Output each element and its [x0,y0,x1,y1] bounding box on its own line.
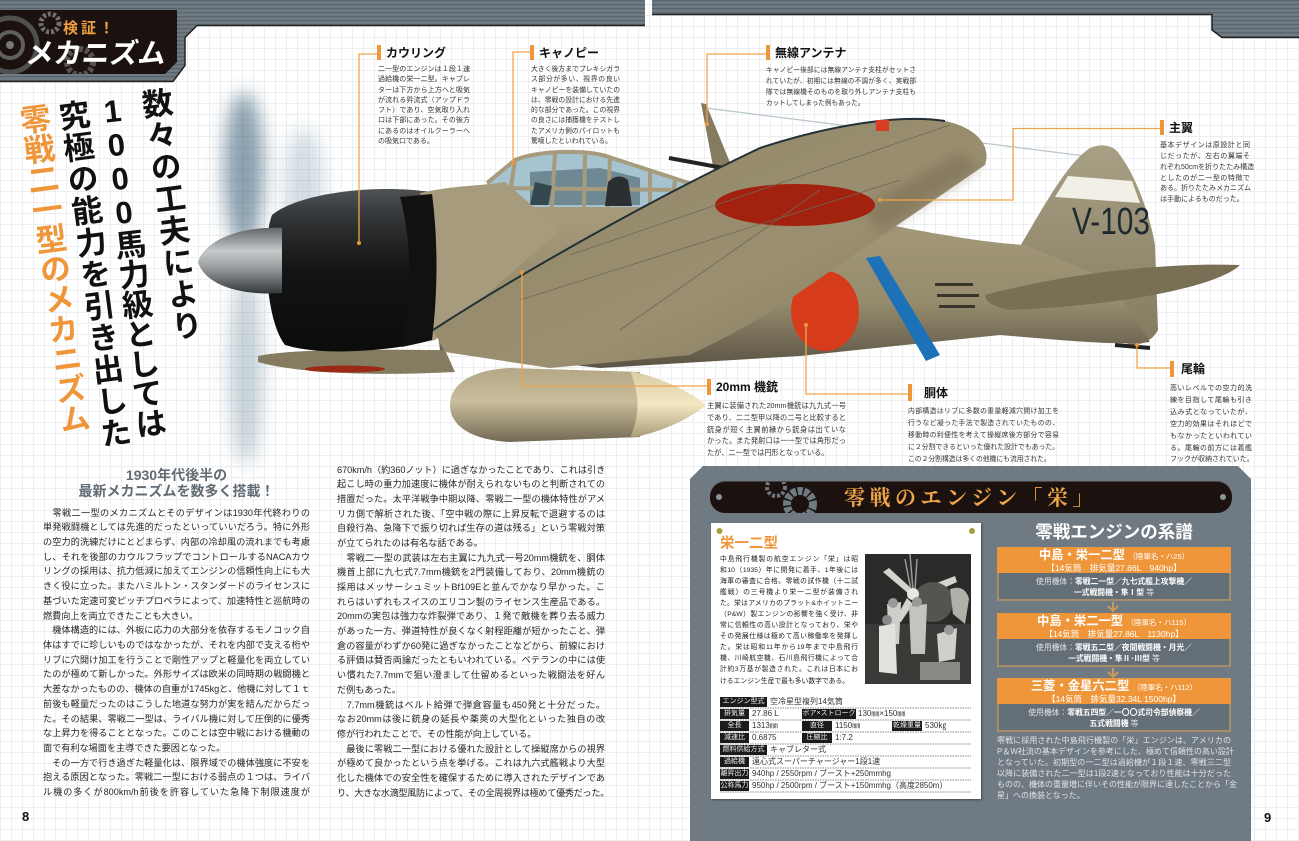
card text: 常に信頼性の高い設計となっており、栄や [720,622,858,629]
main wing [433,119,987,368]
callout: 尾輪: もなかったといわれてい [1170,433,1252,440]
box 1 header: 中島・栄一二型 （陸軍名・ハ25） [1039,548,1189,562]
panel paragraph: 以降に装備された二一型は1段2速となっており性能は十分だった [997,769,1231,778]
blue stripe [866,256,940,361]
body text column 2: 20mmの実包は強力な炸裂弾であり、１発で敵機を葬り去る威力 [337,611,605,621]
card text: 海軍の審査に合格。零戦の試作機（十二試 [720,578,858,585]
body text column 1: 面で有利な場面を主導できた要因となった。 [43,743,225,753]
card text: 艦戦）の三号機より栄一二型が装備され [720,589,858,596]
box 3 header [997,678,1231,704]
body text column 1: 零戦二一型のメカニズムとそのデザインは1930年代終わりの [52,508,310,518]
callout: 20mm 機銃: かった。また発射口は一一型では角形だっ [707,436,846,445]
row: 全長 [720,721,946,731]
lineage box 3 [997,678,1231,732]
body text column 2: が極めて良かったという点を挙げる。これは九六式艦戦より大型 [337,758,605,768]
body text column 1: た。その結果、零戦二一型は、ライバル機に対して圧倒的に優秀 [43,714,310,724]
callout: 主翼: は手動によるものだった。 [1160,196,1244,203]
antenna wire [706,108,1085,156]
card text [720,555,858,685]
body text column 1: ル機の多くが800km/h前後を許容していた急降下制限速度が [43,787,310,797]
body text column 2: 670km/h（約360ノット）に過ぎなかったことであり、これは引き [337,464,605,474]
body section heading: 1930年代後半の [126,467,227,483]
antenna mast [701,103,738,182]
body text column 1: 抱える原因となった。零戦二一型における弱点の１つは、ライバ [43,772,310,782]
lineage heading: 零戦エンジンの系譜 [1035,522,1193,542]
body text column 1: 基づいた定速可変ピッチプロペラによって、加速特性と巡航時の [43,596,310,606]
card text: た。栄は昭和11年から19年まで中島飛行 [720,644,858,651]
box 1 header [997,547,1231,573]
body text column 2: 7.7mm機銃はベルト給弾で弾倉容量も450発と十分だった。 [347,700,605,710]
header large label: メカニズム [24,38,168,69]
box 3 header: 三菱・金星六二型 （陸軍名・ハ112） [1031,679,1197,693]
body text column 1 [43,508,310,797]
box 1 aircraft: 一式戦闘機・隼Ⅰ型 等 [1074,588,1154,597]
panel paragraph: P＆W社流の基本デザインを参考にした、極めて信頼性の高い設計 [997,747,1234,756]
callout: 胴体: 胴体 [924,386,948,400]
row: 過給機: 遠心式スーパーチャージャー1段1速 [752,757,880,766]
panel paragraph [997,736,1237,800]
callout: キャノピー: ス部分が多い、視界の良い [531,76,620,83]
headline line 2: 1000馬力級としては [93,92,167,440]
engine cowling [266,189,432,351]
row: エンジン型式: 空冷星型複列14気筒 [770,697,843,706]
callout: 尾輪: フックが収納されていた。 [1170,456,1254,463]
callout: キャノピー: は、零戦の設計における先進 [531,97,620,104]
callout: 主翼: 主翼 [1169,121,1193,135]
fuselage hinomaru [791,271,859,351]
card text: 中島飛行機製の航空エンジン「栄」は昭 [720,556,858,562]
callout: 20mm 機銃: 主翼に装備された20mm機銃は九九式一号 [707,401,846,410]
callout: キャノピー: たアメリカ側のパイロットも [531,128,620,135]
body text column 2: 自殺行為、急降下で振り切れば生存の道は残る」という零戦対策 [337,523,605,533]
row: 排気量: 130㎜×150㎜ [858,709,905,718]
body text column 2: る評価は賛否両論だったともいわれている。ベテランの中には使 [337,655,605,665]
card heading: 栄一二型 [720,536,778,552]
card text: （P&W）製エンジンの影響を強く受け、非 [720,611,858,618]
callout: 主翼: ある。折りたたみメカニズム [1160,185,1251,192]
callout: キャノピー: 大きく後方までプレキシガラ [531,66,620,73]
panel paragraph: となっていた。初期型の一二型は過給機が１段１速、零戦三二型 [997,758,1231,767]
panel title bar [710,482,1232,513]
callout: 主翼: れぞれ50cmを折りたたみ構造 [1160,164,1254,171]
horizontal tail [985,265,1240,310]
body text column 1: し、それを後部のカウルフラップでコントロールするNACAカウ [43,552,310,562]
body text column 2 [337,464,609,798]
forward fuselage panel [420,182,560,342]
callout: 無線アンテナ: れていたが、初期には無線の不調が多く、実戦部 [766,78,916,85]
callout: カウリング [377,45,470,145]
callout: 胴体 [908,384,1059,463]
body text column 2: 修が行われたことで、その性能が向上している。 [337,729,536,739]
callout: 無線アンテナ: カットしてしまった例もあった。 [766,100,864,107]
headline line 1: 数々の工夫により [135,86,203,344]
body text column 2: い慣れた7.7mmで狙い澄まして仕留めるといった戦闘法を好ん [337,670,605,680]
propeller blur [224,92,324,465]
page number 9: 9 [1264,810,1271,825]
card text: 機、川崎航空機、石川島飛行機によって合 [720,655,858,662]
card text: た。栄はアメリカのプラット&ホイットニー [720,600,858,607]
callout: カウリング: ターは下方から上方へと吸気 [378,87,470,94]
page number 8: 8 [22,809,29,824]
row: 減速比: 0.6875 [752,733,776,742]
box 1 aircraft [997,573,1231,601]
row: 排気量: ボア×ストローク [802,710,856,717]
body text column 1: その一方で行き過ぎた軽量化は、限界域での機体強度に不安を [52,758,310,768]
callout: 20mm 機銃: であり、二二型甲以降の二号と比較すると [707,413,846,422]
callout: 胴体: 移動時の利便性を考えて操縦席後方部分で容易 [908,432,1059,439]
body text column 1: リブに穴開け加工を行うことで剛性アップと軽量化を両立してい [43,655,310,665]
body text column 2: なお20mmは後に銃身の延長や薬莢の大型化といった独自の改 [337,714,605,724]
header tag: 検証！メカニズム [0,10,177,74]
body section heading: 最新メカニズムを数多く搭載！ [78,483,274,499]
body text column 2: 採用はメッサーシュミットBf109Eと並んでかなり早かった。こ [337,582,605,592]
body text column 2: があった一方、弾道特性が良くなく射程距離が短かったこと、弾 [337,626,605,636]
body text column 1: 体はすでに珍しいものではなかったが、それを内部で支える桁や [43,640,310,650]
row: 燃料供給方式 [720,745,826,755]
row: 排気量: 排気量 [724,710,745,717]
callout: 胴体: 内部構造はリブに多数の重量軽減穴開け加工を [908,408,1059,415]
callout: 尾輪: る。尾輪の前方には着艦 [1170,445,1252,452]
tail fin: V-103 [1072,201,1150,243]
row: 離昇出力: 離昇出力 [720,770,748,777]
body text column 1: 大差なかったものの、機体の自重が1745kgと、他機に対して１ｔ [43,684,310,694]
body text column 1: の空力的洗練だけにとどまらず、内部の冷却風の流れまでも考慮 [43,537,310,547]
row: 排気量: 27.86 L [752,709,779,718]
body text column 1: きく役に立った。またハミルトン・スタンダードのライセンスに [43,581,310,591]
row: 全長: 直径 [810,722,824,729]
box 2 header: 中島・栄二一型 （陸軍名・ハ115） [1037,614,1191,628]
callout: 主翼: 基本デザインは原設計と同 [1160,142,1250,149]
body text column 2: 零戦二一型の武装は左右主翼に九九式一号20mm機銃を、胴体 [346,553,605,563]
callout: 20mm 機銃: 銃身が短く主翼前縁から銃身は出ていな [707,424,846,434]
row: 全長: 乾燥重量 [893,722,921,729]
callout: 主翼 [1160,120,1254,203]
callout: カウリング: 過給機の栄一二型。キャブレ [378,76,470,83]
photo: engine crew [865,554,971,684]
row: 燃料供給方式: キャブレター式 [770,745,826,754]
cowl flaps [400,194,436,347]
panel paragraph: 星」への換装となった。 [997,791,1085,800]
spec table [720,697,947,791]
tail fin [1015,145,1158,345]
row: 減速比: 1:7.2 [835,733,853,742]
vertical headline [13,86,203,451]
callout: 主翼: じだったが、左右の翼端そ [1160,153,1250,160]
callout: 胴体: 行うなど凝った手法で製造されていたものの、 [908,420,1059,427]
callout: 尾輪: 練を目指して尾輪も引き [1170,397,1252,404]
headline line 4: 零戦二一型のメカニズム [13,102,91,436]
callout: キャノピー: 驚嘆したといわれている。 [531,138,612,145]
row: 全長: 1313㎜ [752,721,778,730]
panel title text: 零戦のエンジン「栄」 [844,486,1098,510]
panel paragraph: 零戦に採用された中島飛行機製の「栄」エンジンは、アメリカの [997,736,1231,744]
body text column 2: れらはいずれもスイスのエリコン製のライセンス生産品である。 [337,597,605,607]
row: 排気量 [720,709,906,719]
callout: キャノピー [530,45,620,145]
body text column 1: たのが極めて新しかった。外形サイズは欧米の同時期の戦闘機と [43,669,310,679]
callout: カウリング: の吸気口である。 [378,138,434,145]
headline line 3: 究極の能力を引き出した [52,98,133,451]
stencil marking [935,283,979,308]
row: 全長: 1150㎜ [835,721,860,730]
callout: 胴体: この２分割構造は多くの他機にも流用された。 [908,456,1051,463]
callout: キャノピー: キャノピー [539,46,599,60]
box 2 header [997,613,1231,639]
body text column 2: 化した機体での安全性を確保するために導入されたデザインであ [337,773,605,783]
row: 全長: 530㎏ [925,721,946,730]
row: 過給機: 過給機 [724,758,745,765]
callout: カウリング: 口は下部にあった。その後方 [378,117,470,124]
callout: 尾輪: 尾輪 [1181,362,1205,376]
lineage box 2 [997,613,1231,667]
body text column 1: 燃費向上を両立できたことも大きい。 [43,611,198,621]
body text column 1: 前後も軽量だったのはこうした地道な努力が実を結んだからだっ [43,699,310,709]
callout: カウリング: にあるのはオイルクーラーへ [378,128,470,135]
body text column 1: リングの採用は、抗力低減に加えてエンジンの信頼性向上にも大 [43,566,310,576]
callout: 主翼: としたのが二一型の特徴で [1160,175,1250,182]
card text: けるエンジン生産で最も多い数字である。 [720,678,849,685]
callout: 尾輪: 込み式となっていたが、 [1170,409,1252,416]
callout: 無線アンテナ [766,45,916,107]
box 1 aircraft: 使用機体：零戦二一型／九七式艦上攻撃機／ [1036,577,1192,586]
body text column 2: 倉の容量がわずか60発に過ぎなかったことなどから、前線におけ [337,641,605,651]
box 3 header: 【14気筒 排気量32.34L 1500hp】 [1047,694,1181,704]
callout: 無線アンテナ: 無線アンテナ [775,46,847,60]
box 2 aircraft [997,639,1231,667]
body text column 2: が立てられたのは有名な話である。 [337,538,483,548]
lineage box 1 [997,547,1231,601]
box 1 header: 【14気筒 排気量27.86L 940hp】 [1046,563,1182,573]
row: 離昇出力: 940hp / 2550rpm / ブースト+250mmhg [752,769,891,778]
box 2 aircraft: 使用機体：零戦五二型／夜間戦闘機・月光／ [1036,643,1192,652]
row: 燃料供給方式: 燃料供給方式 [722,746,764,753]
callout: 20mm 機銃: 20mm 機銃 [716,380,778,394]
row: 減速比: 圧縮比 [806,734,828,741]
body text column 2: 機首上部に九七式7.7mm機銃を2門装備しており、20mm機銃の [337,567,605,577]
callout: 20mm 機銃: たが、二一型では円形となっている。 [707,448,828,457]
callout: 無線アンテナ: 隊では無線機そのものを取り外しアンテナ支柱も [766,89,916,96]
callout: カウリング: が流れる昇流式（アップドラ [378,97,470,104]
body text column 2: だ例もあった。 [337,685,401,695]
row: 公称馬力: 950hp / 2500rpm / ブースト+150mmhg（高度2850m） [752,781,947,790]
canopy [487,152,695,207]
tail wheel [1115,345,1150,348]
gear decoration [716,482,1226,513]
body text column 1: な上昇力を得ることとなった。このことは空中戦における機動の [43,728,310,738]
row: エンジン型式 [720,697,843,707]
body text column 1: 機体構造的には、外板に応力の大部分を依存するモノコック自 [52,625,310,635]
row: 全長: 全長 [728,722,742,729]
card text: その発展仕様は極めて高い稼働率を発揮し [720,633,858,640]
lower wing [258,350,455,374]
callout: 尾輪 [1170,361,1254,463]
callout: 尾輪: 空力的効果はそれほどで [1170,421,1252,428]
body text column 2: 起こし時の重力加速度に機体が耐えられないものと判断されての [337,479,605,489]
body text column 2: り、大きな水滴型風防によって、その全周視界は極めて優秀だった。 [337,788,609,798]
body section heading [78,467,274,499]
callout: 尾輪: 高いレベルでの空力的洗 [1170,385,1252,392]
callout: キャノピー: 的な部分であった。この視界 [531,107,620,114]
callout: 胴体: に２分割できるといった優れた設計でもあった。 [908,444,1059,451]
row: 公称馬力: 公称馬力 [720,782,748,789]
row: 減速比: 減速比 [724,734,745,741]
box 3 aircraft: 使用機体：零戦五四型／一〇〇式司令部偵察機／ [1028,708,1200,717]
box 2 header: 【14気筒 排気量27.86L 1130hp】 [1044,629,1184,639]
callout: キャノピー: キャノピーを装備していたの [531,87,620,94]
callout: カウリング: カウリング [386,46,446,60]
pins [716,528,975,534]
callout: 20mm 機銃 [707,379,846,457]
callout: キャノピー: の良さには捕獲機をテストし [531,117,620,124]
callout: カウリング: フト）であり、空気取り入れ [378,107,470,114]
panel paragraph: ものの、機体の重量増に伴いその性能が限界に達したことから「金 [997,780,1237,789]
body text column 2: リカ側で解析された後、「空中戦の際に上昇反転で退避するのは [337,509,605,519]
callout: カウリング: 二一型のエンジンは１段１速 [378,66,470,73]
callout: 無線アンテナ: キャノピー後部には無線アンテナ支柱がセットさ [766,67,916,74]
box 2 aircraft: 一式戦闘機・隼Ⅱ･Ⅲ型 等 [1068,654,1160,663]
box 3 aircraft: 五式戦闘機 等 [1090,719,1138,728]
card: 栄一二型 [711,523,981,799]
drop tank [450,368,706,442]
header small label: 検証！ [63,20,117,37]
gun [669,158,745,172]
row: 減速比 [720,733,853,743]
body text column 1: 単発戦闘機としては先進的だったといっていいだろう。特に外形 [43,522,310,532]
panel: 零戦のエンジン「栄」 [690,466,1251,841]
box 3 aircraft [997,704,1231,732]
card text: 計約3万基が製造された。これは日本にお [720,666,858,673]
fuselage [420,182,1150,368]
spinner [198,228,282,293]
body text column 2: 最後に零戦二一型における優れた設計として操縦席からの視界 [346,744,605,754]
body text column 2: 措置だった。太平洋戦争中期以降、零戦二一型の機体特性がアメ [337,494,605,504]
row: エンジン型式: エンジン型式 [722,698,764,705]
card text: 和10（1935）年に開発に着手、1年後には [720,567,858,574]
